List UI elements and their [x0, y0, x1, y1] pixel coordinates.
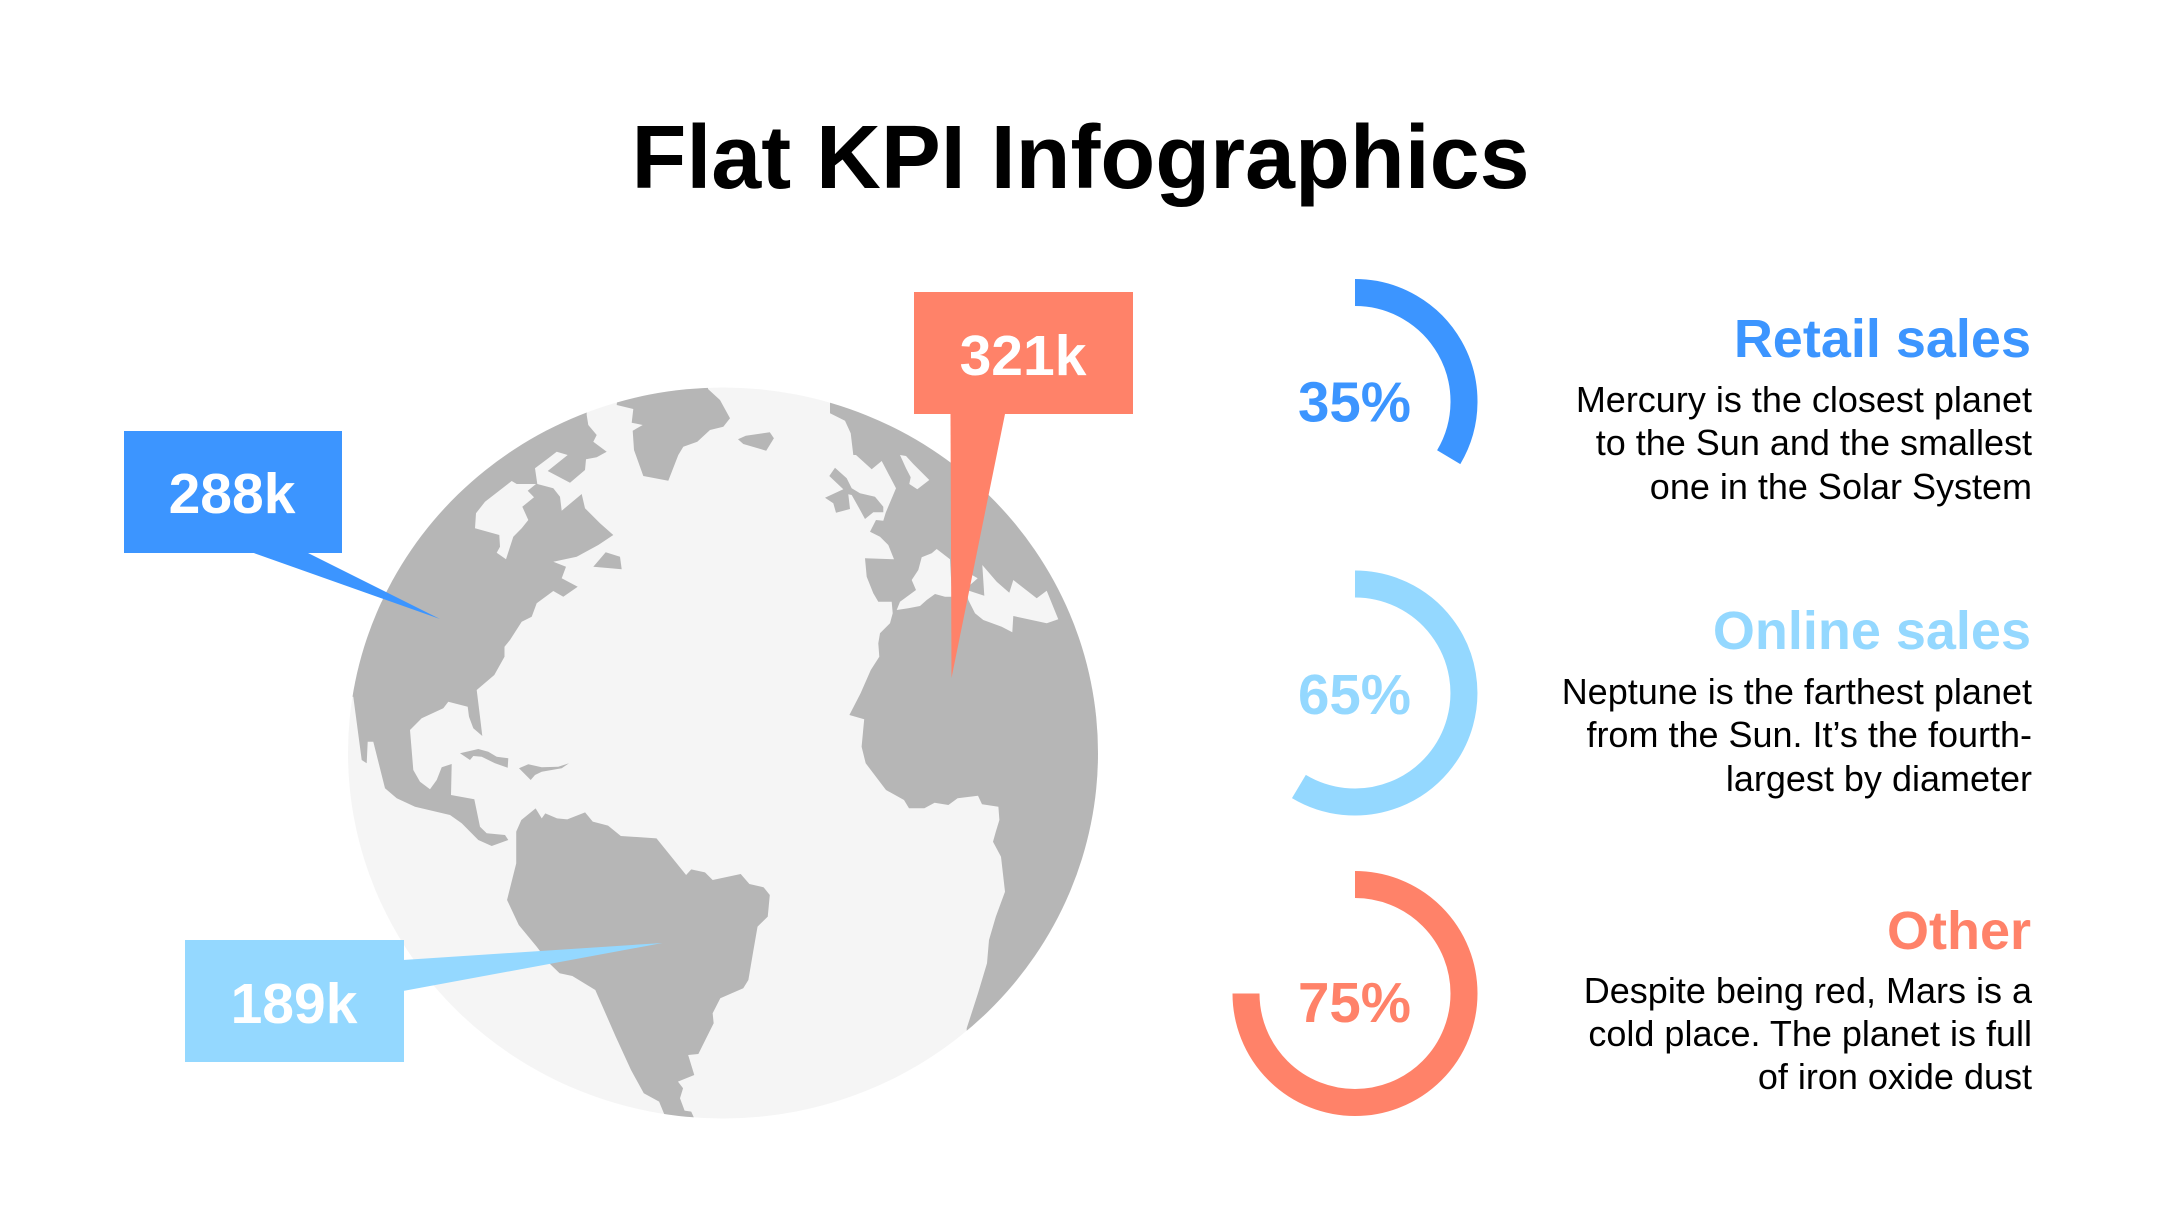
heading: online sales: Online sales: [1713, 601, 2031, 661]
description: Despite being red, Mars is a: [1584, 970, 2033, 1011]
callout pointer: [950, 414, 1005, 678]
Hispaniola: [519, 763, 569, 780]
KPI: online sales: [1298, 584, 2032, 802]
callout box: [914, 292, 1133, 414]
Baltic Sea: [900, 455, 929, 489]
percent 65%: 65%: [1298, 663, 1411, 726]
continents: [352, 388, 1098, 1118]
callout box: [185, 940, 404, 1062]
ring 75%: [1246, 884, 1464, 1102]
KPI: other: [1246, 884, 2033, 1102]
description: cold place. The planet is full: [1588, 1013, 2032, 1054]
description: from the Sun. It’s the fourth-: [1586, 714, 2032, 755]
Cuba: [460, 749, 508, 768]
Mediterranean small inlet: [970, 575, 978, 584]
description: Neptune is the farthest planet: [1562, 671, 2032, 712]
callout box: [124, 431, 342, 553]
Greenland: [616, 388, 730, 481]
percent 35%: 35%: [1298, 370, 1411, 434]
callout: 288k: [124, 431, 440, 619]
KPI: retail sales: [1298, 292, 2032, 507]
Newfoundland island: [593, 552, 622, 569]
Mediterranean east: [967, 565, 1058, 632]
Europe and Africa: [830, 402, 1098, 1031]
description: [1584, 970, 2033, 1097]
Great Britain and Ireland: [825, 468, 883, 519]
South America: [507, 808, 770, 1130]
globe: [348, 388, 1098, 1118]
callout value: 189k: [231, 972, 358, 1036]
description: to the Sun and the smallest: [1596, 422, 2032, 463]
Hudson Bay: [475, 481, 536, 559]
percent 75%: 75%: [1298, 971, 1411, 1034]
description: one in the Solar System: [1650, 466, 2032, 507]
callout: 189k: [185, 940, 662, 1062]
callout: 321k: [914, 292, 1133, 678]
description: largest by diameter: [1726, 758, 2032, 799]
heading: retail sales: Retail sales: [1734, 309, 2031, 369]
ring 35%: [1355, 292, 1464, 457]
Mediterranean west: [897, 549, 952, 610]
title: Flat KPI Infographics: [631, 108, 1530, 208]
description: [1562, 671, 2032, 799]
description: [1576, 379, 2032, 507]
Iceland: [738, 432, 774, 451]
callout value: 321k: [960, 324, 1087, 388]
description: of iron oxide dust: [1758, 1056, 2032, 1097]
callout value: 288k: [169, 462, 296, 526]
heading: other: Other: [1887, 901, 2031, 961]
ring 65%: [1299, 584, 1464, 802]
North America: [352, 412, 614, 846]
callout pointer: [403, 943, 662, 991]
globe ocean disc: [348, 388, 1098, 1118]
description: Mercury is the closest planet: [1576, 379, 2032, 420]
callout pointer: [251, 552, 440, 619]
